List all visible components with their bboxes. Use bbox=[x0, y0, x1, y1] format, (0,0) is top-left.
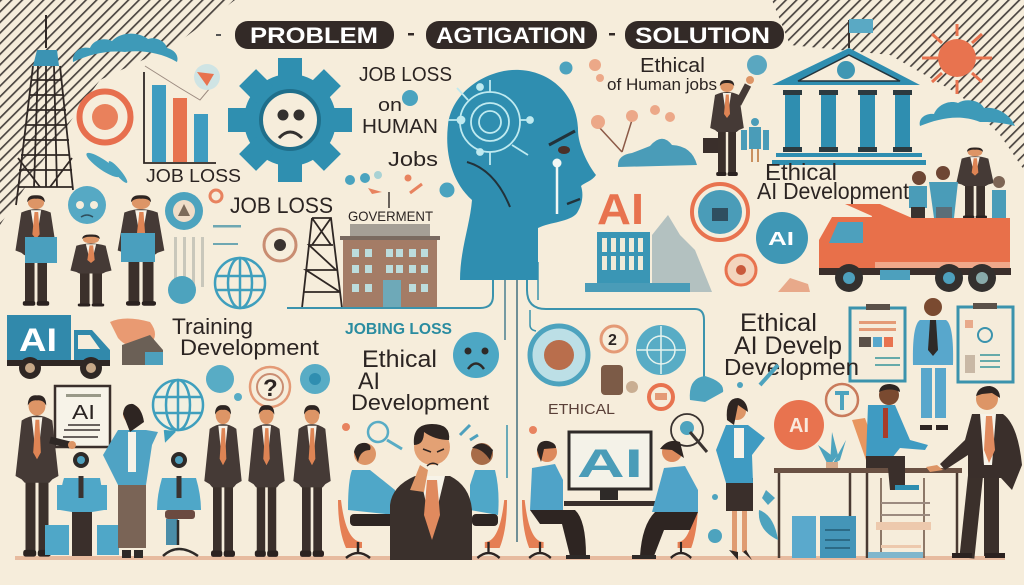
icon: magnifier and small dots bbox=[342, 422, 478, 449]
icon: target bbox=[80, 92, 130, 142]
clipboards bbox=[850, 303, 1013, 382]
icons: small teal leaves bbox=[708, 365, 778, 543]
figure: man seated on desk bbox=[852, 384, 928, 490]
icon: circle badges with AI: AI bbox=[768, 229, 794, 249]
truck: orange dump bbox=[819, 204, 1011, 292]
icons: round worried badges bbox=[68, 186, 296, 261]
government building: GOVERMENT bbox=[348, 208, 433, 224]
text: ethical AI development center: AI bbox=[358, 368, 380, 395]
icon: globe upper bbox=[215, 258, 265, 308]
icon: question target and teal blobs: ? bbox=[263, 375, 278, 402]
title bar: SOLUTION bbox=[635, 23, 770, 48]
text: job loss on human jobs: HUMAN bbox=[362, 116, 438, 138]
text: ethical AI develop development bbox=[724, 309, 859, 380]
icon: sun bbox=[922, 24, 992, 94]
icon: orange AI circle bbox=[774, 400, 824, 450]
figures: three standing men bbox=[204, 405, 331, 557]
icon: question target and teal blobs bbox=[206, 364, 330, 407]
figures: two people at AI monitor: AI bbox=[577, 442, 643, 486]
government building bbox=[340, 192, 440, 307]
figure: standing man in blue bbox=[913, 298, 953, 430]
icon: cloud top left bbox=[73, 34, 178, 62]
icon: orange AI circle: AI bbox=[789, 415, 809, 437]
text: ethical AI development: AI Development bbox=[757, 178, 910, 204]
figure group on truck bbox=[909, 147, 1006, 219]
desk with shelves and boxes bbox=[774, 468, 962, 558]
icons: lower right cluster of badges: 2 bbox=[608, 332, 617, 349]
chart: job loss bars bbox=[144, 66, 216, 163]
title bar: AGTIGATION bbox=[436, 23, 586, 48]
icon: sad face bbox=[453, 332, 499, 378]
text: ethical AI develop development: Ethical bbox=[740, 309, 817, 337]
icon: orange and dark sack bbox=[110, 318, 163, 365]
icon: plant and decorations bbox=[560, 55, 767, 152]
hatching: top left bbox=[0, 0, 235, 225]
text: ethical AI development center: Development bbox=[351, 390, 489, 415]
text: ethical AI development: Ethical bbox=[765, 159, 837, 185]
orange AI with building bbox=[585, 185, 712, 292]
text: ethical of human jobs: Ethical bbox=[640, 55, 705, 77]
figure: robot with briefcases bbox=[45, 452, 119, 556]
icon: circle badges with AI bbox=[692, 184, 810, 292]
text: ethical AI development bbox=[757, 159, 910, 204]
text: ethical small: ETHICAL bbox=[548, 401, 615, 418]
figure: presenter with AI board: AI bbox=[72, 402, 95, 424]
text: ethical AI develop development: Developmen bbox=[724, 354, 859, 380]
hatching: top right bbox=[772, 0, 1024, 170]
delivery truck: AI bbox=[7, 315, 110, 379]
icons: lower right cluster of badges bbox=[529, 325, 723, 452]
icon: oil tower left bbox=[16, 15, 73, 205]
figures: stressed man with seated colleagues bbox=[338, 424, 507, 560]
brain network bbox=[448, 80, 533, 165]
connector lines bbox=[287, 255, 704, 542]
icon: sad gear bbox=[228, 58, 352, 182]
delivery truck: AI: AI bbox=[19, 322, 57, 358]
figures: three men with tablets bbox=[15, 195, 164, 306]
text: training development: Development bbox=[180, 335, 319, 360]
figure: man raising arm bbox=[703, 76, 754, 176]
icon: government bank with flag bbox=[772, 19, 926, 165]
icon: cloud middle bbox=[618, 139, 697, 167]
text: ethical AI development center: Ethical bbox=[362, 346, 437, 373]
text: job loss second: JOB LOSS bbox=[230, 193, 333, 218]
orange AI with building: AI bbox=[597, 185, 644, 234]
icon: scattered teal marks bbox=[84, 90, 454, 198]
title bar: PROBLEM bbox=[250, 23, 378, 48]
text: ethical AI develop development: AI Develp bbox=[734, 332, 842, 360]
text: job loss under chart: JOB LOSS bbox=[146, 166, 241, 186]
icon: globe lower bbox=[153, 380, 203, 440]
text: jobing loss: JOBING LOSS bbox=[345, 321, 452, 338]
text: training development: Training bbox=[172, 314, 253, 339]
text: ethical of human jobs bbox=[607, 55, 717, 94]
figure: woman with hand on head bbox=[103, 404, 158, 558]
text: job loss on human jobs bbox=[359, 64, 452, 171]
figure: woman in teal jacket bbox=[716, 398, 765, 560]
figure: presenter with AI board bbox=[16, 386, 110, 557]
figure: man in suit at right bbox=[926, 386, 1022, 559]
icon: potted plant bbox=[818, 432, 846, 471]
text: job loss on human jobs: JOB LOSS bbox=[359, 64, 452, 86]
figure: robot on chair bbox=[157, 452, 201, 556]
icon: grey bars and small teal circle bbox=[168, 225, 241, 304]
text: ethical of human jobs: of Human jobs bbox=[607, 75, 717, 94]
floor strip bbox=[15, 556, 1005, 560]
icon: cloud right bbox=[920, 100, 1015, 126]
text: job loss on human jobs: on bbox=[378, 95, 402, 115]
text: job loss on human jobs: Jobs bbox=[388, 149, 438, 171]
figures: two people at AI monitor bbox=[522, 432, 698, 559]
icon: small teal people bbox=[741, 118, 769, 162]
central head bbox=[447, 70, 596, 280]
icon: oil tower small bbox=[302, 218, 342, 308]
title bar bbox=[216, 21, 784, 49]
icon: small orange leaf emblem bbox=[194, 64, 220, 90]
text: training development bbox=[172, 314, 319, 360]
text: ethical AI development center bbox=[351, 346, 489, 415]
icon: ring badge bbox=[826, 384, 858, 416]
